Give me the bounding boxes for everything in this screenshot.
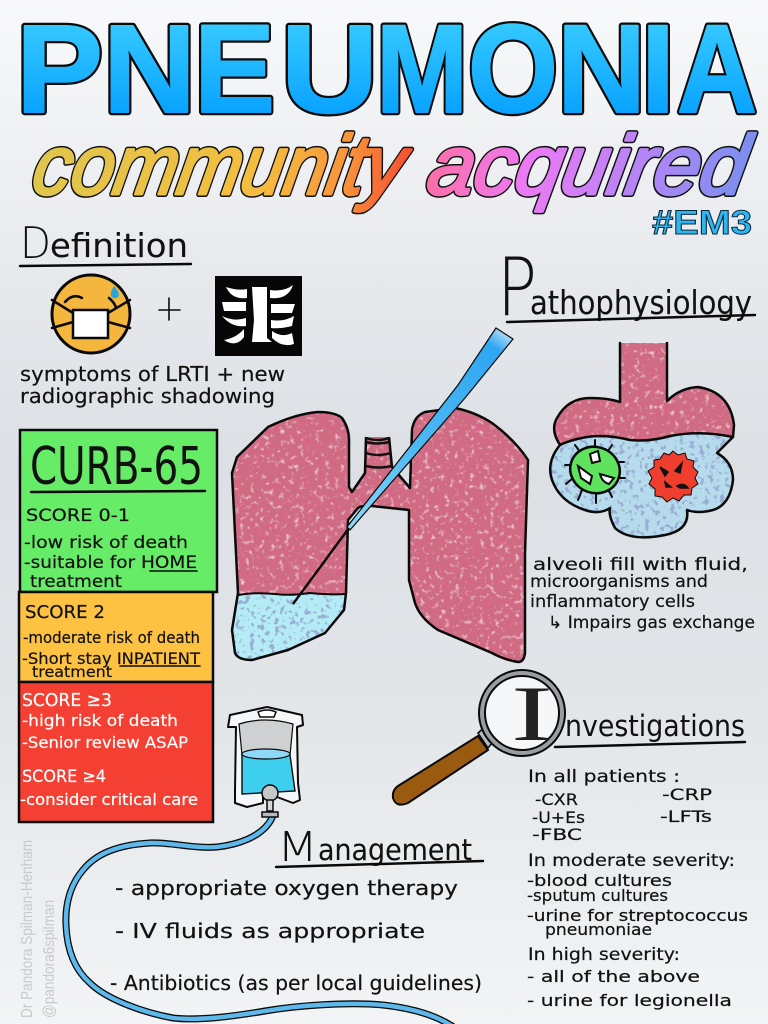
icon: magnifying glass bbox=[393, 670, 565, 805]
lung outline bbox=[232, 408, 528, 662]
text: investigations: -CXR bbox=[535, 790, 578, 809]
lungs bbox=[228, 404, 533, 666]
text: management: - IV fluids as appropriate bbox=[115, 919, 425, 943]
subtitle: community acquired bbox=[27, 118, 759, 212]
title: N bbox=[557, 0, 646, 139]
text: investigations: - all of the above bbox=[527, 967, 700, 986]
text: investigations: -LFTs bbox=[660, 807, 712, 826]
text: investigations: -sputum cultures bbox=[527, 886, 668, 905]
title: O bbox=[468, 0, 558, 139]
title: P bbox=[16, 0, 103, 139]
subtitle: community acquired: community bbox=[27, 118, 417, 212]
icon: masked face bbox=[52, 275, 130, 353]
text: investigations: pneumoniae bbox=[545, 920, 652, 939]
heading: investigations: nvestigations bbox=[565, 709, 745, 743]
icon: IV bag and tube bbox=[66, 707, 452, 1024]
needle bbox=[293, 328, 513, 604]
text: investigations: -CRP bbox=[662, 785, 712, 804]
red section: -high risk of death bbox=[22, 711, 178, 730]
tube bbox=[66, 818, 452, 1024]
heading: definition: D bbox=[20, 218, 51, 269]
icon: chest x-ray bbox=[215, 276, 302, 356]
red microbe bbox=[648, 451, 698, 502]
heading: definition: efinition bbox=[50, 226, 188, 265]
green section bbox=[20, 430, 217, 592]
green section: -low risk of death bbox=[24, 533, 188, 553]
red section bbox=[19, 682, 213, 822]
text: pathophysiology bbox=[530, 555, 755, 633]
alveolus fluid bbox=[550, 433, 733, 537]
green section: treatment bbox=[30, 572, 122, 592]
text: pathophysiology: microorganisms and bbox=[530, 572, 708, 592]
title: I bbox=[641, 0, 675, 139]
text: pathophysiology: inflammatory cells bbox=[530, 592, 695, 612]
text: investigations: -U+Es bbox=[532, 808, 585, 827]
heading: management: M bbox=[277, 823, 318, 871]
diagram: alveolus bbox=[550, 343, 734, 537]
heading: pathophysiology bbox=[497, 241, 755, 334]
title: O bbox=[468, 0, 558, 139]
text: definition: symptoms of LRTI + new bbox=[20, 362, 285, 386]
fluid in left lung bbox=[233, 594, 344, 659]
text: investigations: - urine for legionella bbox=[527, 991, 732, 1010]
title: A bbox=[677, 0, 757, 139]
text: definition bbox=[20, 362, 285, 408]
text: pathophysiology: ↳ Impairs gas exchange bbox=[548, 613, 755, 633]
panel: definition bbox=[20, 218, 302, 408]
green section: SCORE 0-1 bbox=[26, 506, 130, 526]
title: N bbox=[557, 0, 646, 139]
title bbox=[16, 0, 757, 139]
text: investigations: -urine for streptococcus bbox=[527, 906, 748, 925]
title: P bbox=[16, 0, 103, 139]
text: investigations: In high severity: bbox=[528, 945, 680, 965]
bag bbox=[228, 707, 303, 817]
heading: pathophysiology: P bbox=[497, 241, 537, 334]
text: investigations: In moderate severity: bbox=[528, 851, 735, 871]
text: investigations bbox=[527, 767, 748, 1010]
trachea rings bbox=[366, 438, 392, 468]
yellow section: treatment bbox=[32, 663, 112, 681]
alveolus outline bbox=[550, 343, 734, 537]
yellow section bbox=[19, 592, 213, 682]
title: A bbox=[677, 0, 757, 139]
author credit: @pandora6spilman bbox=[41, 900, 58, 1018]
red section: -consider critical care bbox=[20, 790, 198, 809]
title: N bbox=[103, 0, 196, 139]
title: U bbox=[281, 0, 378, 139]
subtitle: community acquired: acquired bbox=[422, 118, 759, 212]
author credit bbox=[19, 840, 58, 1018]
panel: CURB-65 bbox=[19, 430, 217, 822]
title: M bbox=[376, 0, 468, 139]
red section: SCORE ≥3 bbox=[22, 690, 112, 711]
title: I bbox=[641, 0, 675, 139]
heading: management: anagement bbox=[318, 833, 472, 867]
green microbe bbox=[564, 440, 626, 503]
yellow section: -Short stay INPATIENT bbox=[22, 649, 200, 668]
title: E bbox=[194, 0, 275, 139]
subtitle: community acquired: acquired bbox=[422, 118, 759, 212]
green section: -suitable for HOME bbox=[24, 553, 197, 573]
yellow section: -moderate risk of death bbox=[23, 628, 200, 647]
text: investigations: -FBC bbox=[532, 825, 582, 844]
text: management: - appropriate oxygen therapy bbox=[115, 876, 458, 900]
title: M bbox=[376, 0, 468, 139]
fluid line bbox=[238, 593, 346, 595]
text: management bbox=[110, 876, 482, 995]
text: investigations: -blood cultures bbox=[527, 871, 672, 890]
heading: definition bbox=[20, 218, 191, 269]
text: definition: radiographic shadowing bbox=[20, 384, 275, 408]
text: investigations: In all patients : bbox=[528, 767, 680, 787]
hashtag: #EM3 bbox=[652, 204, 752, 242]
alveolus air space bbox=[554, 343, 734, 446]
author credit: Dr Pandora Spilman-Henham bbox=[19, 840, 36, 1018]
text: management: - Antibiotics (as per local guidelines) bbox=[110, 971, 482, 995]
icon: plus bbox=[159, 298, 180, 320]
title: N bbox=[103, 0, 196, 139]
yellow section: SCORE 2 bbox=[25, 602, 105, 623]
subtitle: community acquired: community bbox=[27, 118, 417, 212]
lung tissue bbox=[228, 404, 533, 666]
red section: SCORE ≥4 bbox=[22, 767, 106, 787]
icon: magnifying glass: I bbox=[511, 670, 553, 757]
green section: CURB-65 bbox=[30, 437, 203, 497]
red section: -Senior review ASAP bbox=[22, 733, 188, 752]
title: E bbox=[194, 0, 275, 139]
text: pathophysiology: alveoli fill with fluid, bbox=[533, 555, 748, 575]
heading: management bbox=[276, 823, 483, 871]
title: U bbox=[281, 0, 378, 139]
